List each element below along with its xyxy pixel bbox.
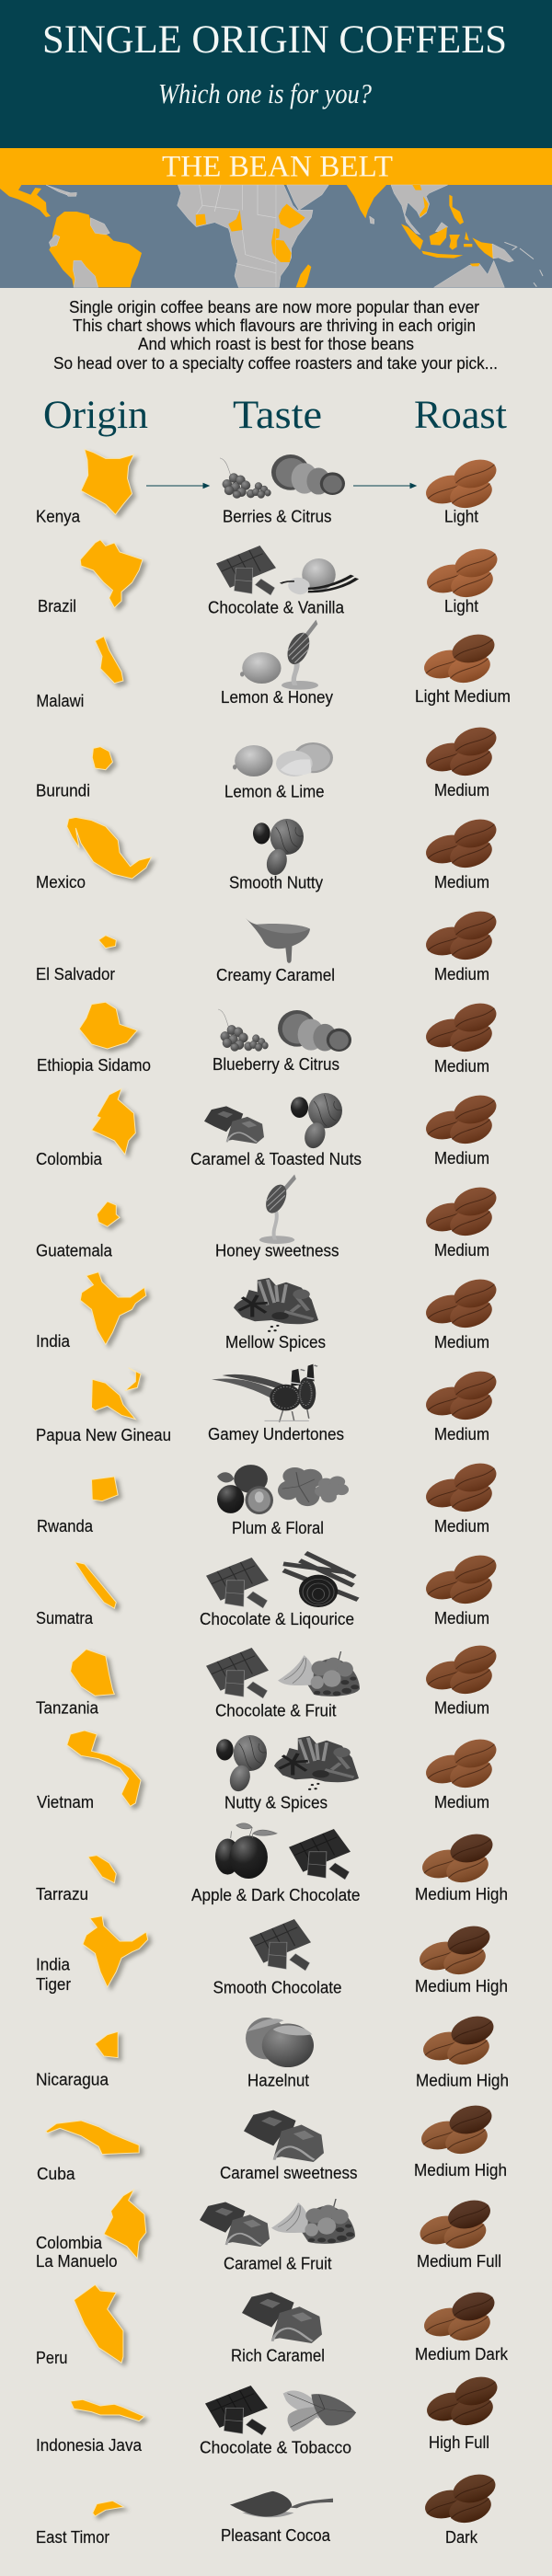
- row: Guatemala: [36, 1177, 500, 1260]
- column headings: Taste: [233, 394, 322, 437]
- origin label: Kenya: [36, 508, 81, 526]
- bean belt banner: [0, 148, 552, 185]
- roast beans: [422, 1641, 500, 1699]
- row: Sumatra: [36, 1551, 500, 1628]
- origin label: Ethiopia Sidamo: [37, 1056, 151, 1075]
- taste label: Hazelnut: [247, 2072, 309, 2090]
- origin label: Cuba: [37, 2165, 75, 2183]
- origin label: El Salvador: [36, 965, 115, 983]
- row: Malawi: [36, 622, 511, 710]
- map: Cuba: [46, 2121, 139, 2155]
- origin label: India: [36, 1332, 71, 1351]
- roast label: Medium: [434, 1333, 489, 1351]
- intro text: Single origin coffee beans are now more popular than ever: [69, 298, 479, 316]
- roast label: Medium: [434, 1609, 489, 1627]
- taste icons: [242, 2293, 322, 2343]
- taste icons: [200, 2199, 355, 2247]
- taste icons: [206, 1648, 360, 1698]
- map: Colombia: [92, 1088, 135, 1155]
- row: Burundi: [36, 723, 500, 801]
- roast label: Dark: [445, 2528, 478, 2547]
- origin label: Malawi: [36, 692, 84, 710]
- roast label: Medium: [434, 1057, 489, 1075]
- row: Indonesia Java: [36, 2373, 500, 2457]
- taste icons: [244, 2110, 324, 2162]
- taste icons: [249, 1919, 311, 1971]
- origin label: East Timor: [36, 2528, 109, 2547]
- taste label: Caramel & Toasted Nuts: [190, 1150, 362, 1168]
- intro text: [53, 298, 498, 373]
- taste label: Mellow Spices: [225, 1333, 326, 1351]
- roast beans: [422, 1551, 500, 1609]
- row: Nicaragua: [36, 2012, 509, 2090]
- taste label: Rich Caramel: [231, 2347, 325, 2365]
- row: Ethiopia Sidamo: [37, 999, 500, 1075]
- row: Mexico: [36, 815, 500, 892]
- roast label: Medium: [434, 781, 489, 799]
- map: Peru: [74, 2284, 123, 2363]
- taste label: Creamy Caramel: [216, 966, 335, 984]
- map: Brazil: [80, 540, 143, 608]
- taste icons: [215, 1823, 351, 1880]
- roast beans: [419, 1830, 496, 1888]
- taste icons: [206, 1553, 358, 1608]
- origin label: Nicaragua: [36, 2071, 109, 2089]
- map: Tarrazu: [88, 1856, 116, 1883]
- taste label: Apple & Dark Chocolate: [191, 1886, 361, 1904]
- roast label: Medium High: [414, 2161, 507, 2179]
- row: El Salvador: [36, 907, 500, 984]
- taste icons: [212, 1364, 317, 1422]
- taste icons: [204, 1093, 342, 1152]
- roast beans: [422, 1459, 500, 1517]
- taste label: Smooth Chocolate: [213, 1979, 342, 1997]
- column headings: Roast: [414, 394, 507, 437]
- intro text: This chart shows which flavours are thriving in each origin: [73, 316, 476, 335]
- origin label: Peru: [36, 2349, 68, 2367]
- origin label: Colombia: [36, 1150, 103, 1168]
- origin label: Guatemala: [36, 1242, 113, 1260]
- row: Colombia: [36, 1088, 500, 1168]
- row: Tarrazu: [36, 1823, 508, 1904]
- roast beans: [417, 2196, 494, 2254]
- taste label: Lemon & Lime: [224, 783, 324, 801]
- origin label: Sumatra: [36, 1609, 94, 1627]
- roast beans: [423, 2373, 500, 2431]
- intro text: So head over to a specialty coffee roasters and take your pick...: [53, 354, 498, 373]
- taste icons: [233, 742, 333, 776]
- map: Mexico: [67, 817, 152, 879]
- map: East Timor: [93, 2501, 124, 2516]
- origin label: Tarrazu: [36, 1885, 88, 1903]
- taste icons: [240, 622, 318, 690]
- map: Papua New Guinea: [92, 1368, 141, 1420]
- taste label: Chocolate & Liqourice: [200, 1610, 354, 1628]
- column headings: [43, 394, 507, 437]
- column headings: Origin: [43, 394, 148, 437]
- origin label: La Manuelo: [36, 2252, 118, 2271]
- origin label: [36, 1956, 71, 1994]
- row: Kenya: [36, 449, 500, 526]
- roast beans: [422, 815, 500, 873]
- taste label: Chocolate & Vanilla: [208, 599, 345, 617]
- roast beans: [422, 1367, 500, 1425]
- map: India: [83, 1916, 148, 1987]
- taste icons: [217, 1465, 349, 1514]
- map: El Salvador: [98, 936, 116, 949]
- taste label: Berries & Citrus: [223, 508, 331, 526]
- row: India: [36, 1272, 500, 1351]
- taste icons: [234, 1278, 318, 1332]
- map: Burundi: [92, 747, 112, 770]
- map: Nicaragua: [95, 2031, 118, 2058]
- row: Colombia La Manuelo: [36, 2190, 501, 2273]
- arrow: origin to taste: [146, 484, 209, 488]
- roast beans: [420, 630, 498, 688]
- taste label: Caramel & Fruit: [224, 2255, 331, 2273]
- taste label: Caramel sweetness: [220, 2164, 357, 2182]
- roast label: Medium: [434, 965, 489, 983]
- taste label: Chocolate & Fruit: [215, 1702, 337, 1720]
- row: Papua New Gineau: [36, 1364, 500, 1444]
- roast beans: [423, 545, 500, 603]
- arrow: taste to roast: [353, 484, 416, 488]
- row: Peru: [36, 2284, 509, 2367]
- taste icons: [246, 918, 310, 963]
- row: Rwanda: [37, 1459, 500, 1537]
- subtitle: Which one is for you?: [158, 77, 372, 109]
- taste icons: [259, 1177, 295, 1244]
- roast beans: [418, 2101, 495, 2159]
- roast label: Medium: [434, 873, 489, 891]
- taste icons: [218, 1009, 351, 1052]
- taste icons: [205, 2386, 356, 2435]
- row: Tanzania: [36, 1641, 500, 1720]
- roast label: High Full: [429, 2433, 489, 2452]
- roast beans: [422, 1275, 500, 1333]
- map: Java: [71, 2399, 144, 2421]
- origin label: Burundi: [36, 782, 90, 800]
- roast label: Medium: [434, 1241, 489, 1259]
- taste icons: [216, 1735, 359, 1795]
- roast beans: [420, 2012, 497, 2070]
- taste label: Honey sweetness: [215, 1242, 339, 1260]
- roast beans: [416, 1922, 493, 1980]
- header panel: [0, 0, 552, 148]
- taste icons: [246, 2018, 314, 2067]
- bean belt heading: THE BEAN BELT: [162, 151, 393, 184]
- roast label: Medium: [434, 1699, 489, 1718]
- taste icons: [253, 819, 304, 879]
- origin label: Colombia: [36, 2234, 103, 2252]
- row: India Tiger: [36, 1916, 508, 1997]
- world map of the bean belt: [0, 185, 552, 288]
- map: Colombia: [104, 2190, 146, 2259]
- roast label: Light Medium: [415, 687, 511, 706]
- taste label: Plum & Floral: [232, 1519, 324, 1537]
- row: East Timor: [36, 2470, 499, 2547]
- roast label: Medium: [434, 1517, 489, 1535]
- origin label: Papua New Gineau: [36, 1426, 171, 1444]
- origin label: Brazil: [38, 597, 76, 615]
- origin label: Tanzania: [36, 1699, 99, 1718]
- roast beans: [422, 907, 500, 965]
- map: Guatemala: [97, 1202, 120, 1226]
- origin label: Mexico: [36, 873, 86, 891]
- intro text: And which roast is best for those beans: [138, 335, 414, 353]
- taste label: Lemon & Honey: [221, 688, 333, 707]
- roast label: Medium: [434, 1149, 489, 1167]
- map: India: [80, 1272, 146, 1345]
- origin label: India: [36, 1956, 71, 1974]
- roast label: Medium Full: [417, 2252, 501, 2271]
- roast beans: [422, 999, 500, 1057]
- taste icons: [230, 2491, 333, 2517]
- map: Sumatra: [75, 1562, 116, 1608]
- roast beans: [422, 1183, 500, 1241]
- origin label: [36, 2234, 118, 2271]
- row: Vietnam: [37, 1731, 500, 1812]
- taste label: Gamey Undertones: [208, 1425, 344, 1443]
- taste label: Blueberry & Citrus: [213, 1055, 339, 1074]
- taste icons: [220, 454, 345, 499]
- title: SINGLE ORIGIN COFFEES: [42, 18, 507, 62]
- map: Rwanda: [92, 1477, 118, 1501]
- roast beans: [420, 2288, 498, 2346]
- map: Kenya: [81, 449, 133, 514]
- origin label: Rwanda: [37, 1517, 94, 1535]
- taste label: Nutty & Spices: [224, 1794, 328, 1812]
- roast beans: [422, 723, 500, 781]
- taste icons: [216, 546, 357, 595]
- roast beans: [422, 1091, 500, 1149]
- row: Brazil: [38, 540, 500, 617]
- map: Ethiopia: [79, 1002, 137, 1049]
- roast beans: [422, 1735, 500, 1793]
- roast label: Medium High: [415, 1977, 508, 1995]
- roast label: Medium: [434, 1425, 489, 1443]
- taste label: Chocolate & Tobacco: [200, 2439, 351, 2457]
- roast label: Medium Dark: [415, 2345, 509, 2363]
- roast label: Light: [444, 597, 478, 615]
- origin label: Vietnam: [37, 1793, 94, 1811]
- roast beans: [421, 2470, 499, 2528]
- roast label: Medium High: [415, 1885, 508, 1903]
- roast label: Medium High: [416, 2072, 509, 2090]
- taste label: Smooth Nutty: [229, 874, 323, 892]
- origin label: Indonesia Java: [36, 2436, 143, 2455]
- map: Vietnam: [67, 1731, 141, 1806]
- map: Tanzania: [71, 1650, 114, 1696]
- roast label: Medium: [434, 1793, 489, 1811]
- roast label: Light: [444, 508, 478, 526]
- map: Malawi: [95, 637, 123, 684]
- row: Cuba: [37, 2101, 507, 2183]
- roast beans: [422, 455, 500, 513]
- taste label: Pleasant Cocoa: [221, 2526, 331, 2545]
- origin label: Tiger: [36, 1975, 71, 1994]
